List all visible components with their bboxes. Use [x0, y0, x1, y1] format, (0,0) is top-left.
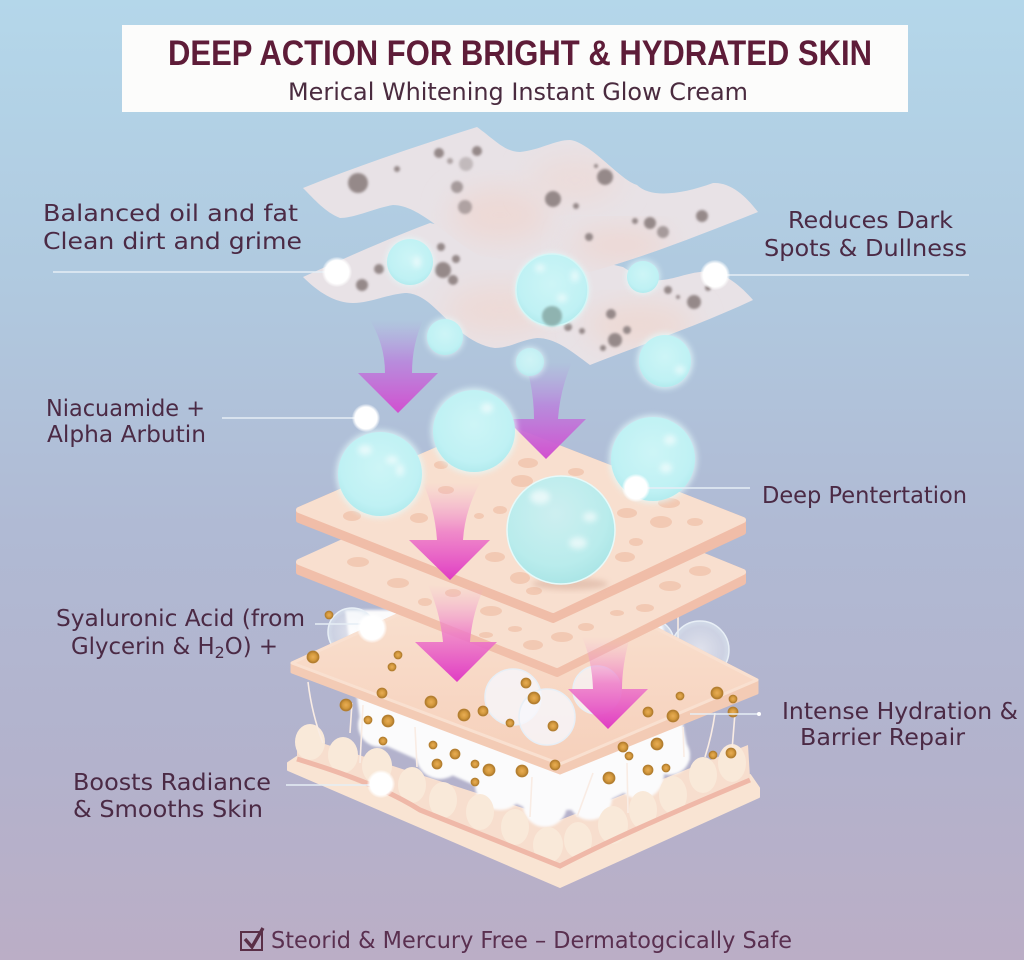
- bubble halos: [336, 238, 697, 518]
- label: balanced oil: Clean dirt and grime: [43, 229, 302, 255]
- cell backing: [297, 735, 750, 866]
- label: balanced oil: Balanced oil and fat: [43, 201, 298, 227]
- white cushion: [345, 610, 690, 827]
- label: boosts radiance: & Smooths Skin: [73, 797, 263, 823]
- label: intense hydration: Intense Hydration &: [782, 699, 1018, 725]
- title: DEEP ACTION FOR BRIGHT & HYDRATED SKIN: [168, 34, 872, 73]
- back translucent bubbles: [328, 608, 729, 694]
- title banner: [122, 25, 908, 112]
- base layer: [288, 757, 759, 887]
- arrow 2: [506, 362, 586, 459]
- arrow 5: [568, 637, 648, 729]
- large bubble shadow: [532, 578, 608, 590]
- epidermis sheet 1: [299, 424, 743, 620]
- icon: checkbox: [241, 928, 263, 950]
- leader line and dot: penetration: [622, 474, 750, 502]
- label: niacuamide: [46, 396, 206, 448]
- cyan bubbles: [336, 238, 697, 590]
- label: syaluronic acid: Syaluronic Acid (from: [56, 606, 305, 632]
- label: intense hydration: Barrier Repair: [800, 725, 966, 751]
- cells: [295, 724, 746, 863]
- arrow 4: [415, 585, 497, 682]
- leader line and dot: dark spots: [700, 260, 969, 290]
- mid dermal sheet: [292, 600, 757, 773]
- gold granules: [307, 611, 738, 786]
- subtitle: Merical Whitening Instant Glow Cream: [288, 78, 748, 106]
- label: niacuamide: Niacuamide +: [46, 396, 205, 422]
- label: reduces dark spots: Reduces Dark: [788, 208, 954, 234]
- label: intense hydration: [782, 699, 1018, 751]
- label: syaluronic acid: Glycerin & H: [71, 634, 216, 660]
- label: reduces dark spots: [764, 208, 967, 262]
- penetration arrows: [358, 320, 648, 729]
- label: syaluronic acid: 2: [215, 643, 225, 662]
- footer note: Steorid & Mercury Free – Dermatogcically Safe: [271, 928, 792, 954]
- label: balanced oil: [43, 201, 302, 255]
- fibres: [308, 617, 735, 817]
- pink membrane: [297, 759, 750, 866]
- bubble highlights: [358, 256, 685, 549]
- label: boosts radiance: Boosts Radiance: [73, 770, 271, 796]
- illustration: skin layers: [288, 424, 759, 887]
- epidermis sheet 2: [299, 472, 743, 674]
- label: reduces dark spots: Spots & Dullness: [764, 236, 967, 262]
- label: niacuamide: Alpha Arbutin: [47, 422, 206, 448]
- leader line and dot: radiance: [286, 770, 395, 798]
- illustration: lower skin film with dark spots: [303, 223, 753, 365]
- leader line: hydration: [690, 712, 761, 716]
- illustration: upper skin film with dark spots: [303, 127, 758, 272]
- label: syaluronic acid: O) +: [225, 634, 278, 660]
- label: syaluronic acid: [56, 606, 305, 662]
- arrow 3: [409, 483, 490, 580]
- leader line and dot: oil: [53, 257, 352, 287]
- label: deep penetration: Deep Pentertation: [762, 483, 967, 509]
- label: boosts radiance: [73, 770, 271, 823]
- arrow 1: [358, 320, 438, 413]
- leader line and dot: syaluronic: [315, 613, 387, 643]
- leader line and dot: niacinamide: [222, 404, 380, 432]
- front translucent bubbles: [485, 666, 621, 745]
